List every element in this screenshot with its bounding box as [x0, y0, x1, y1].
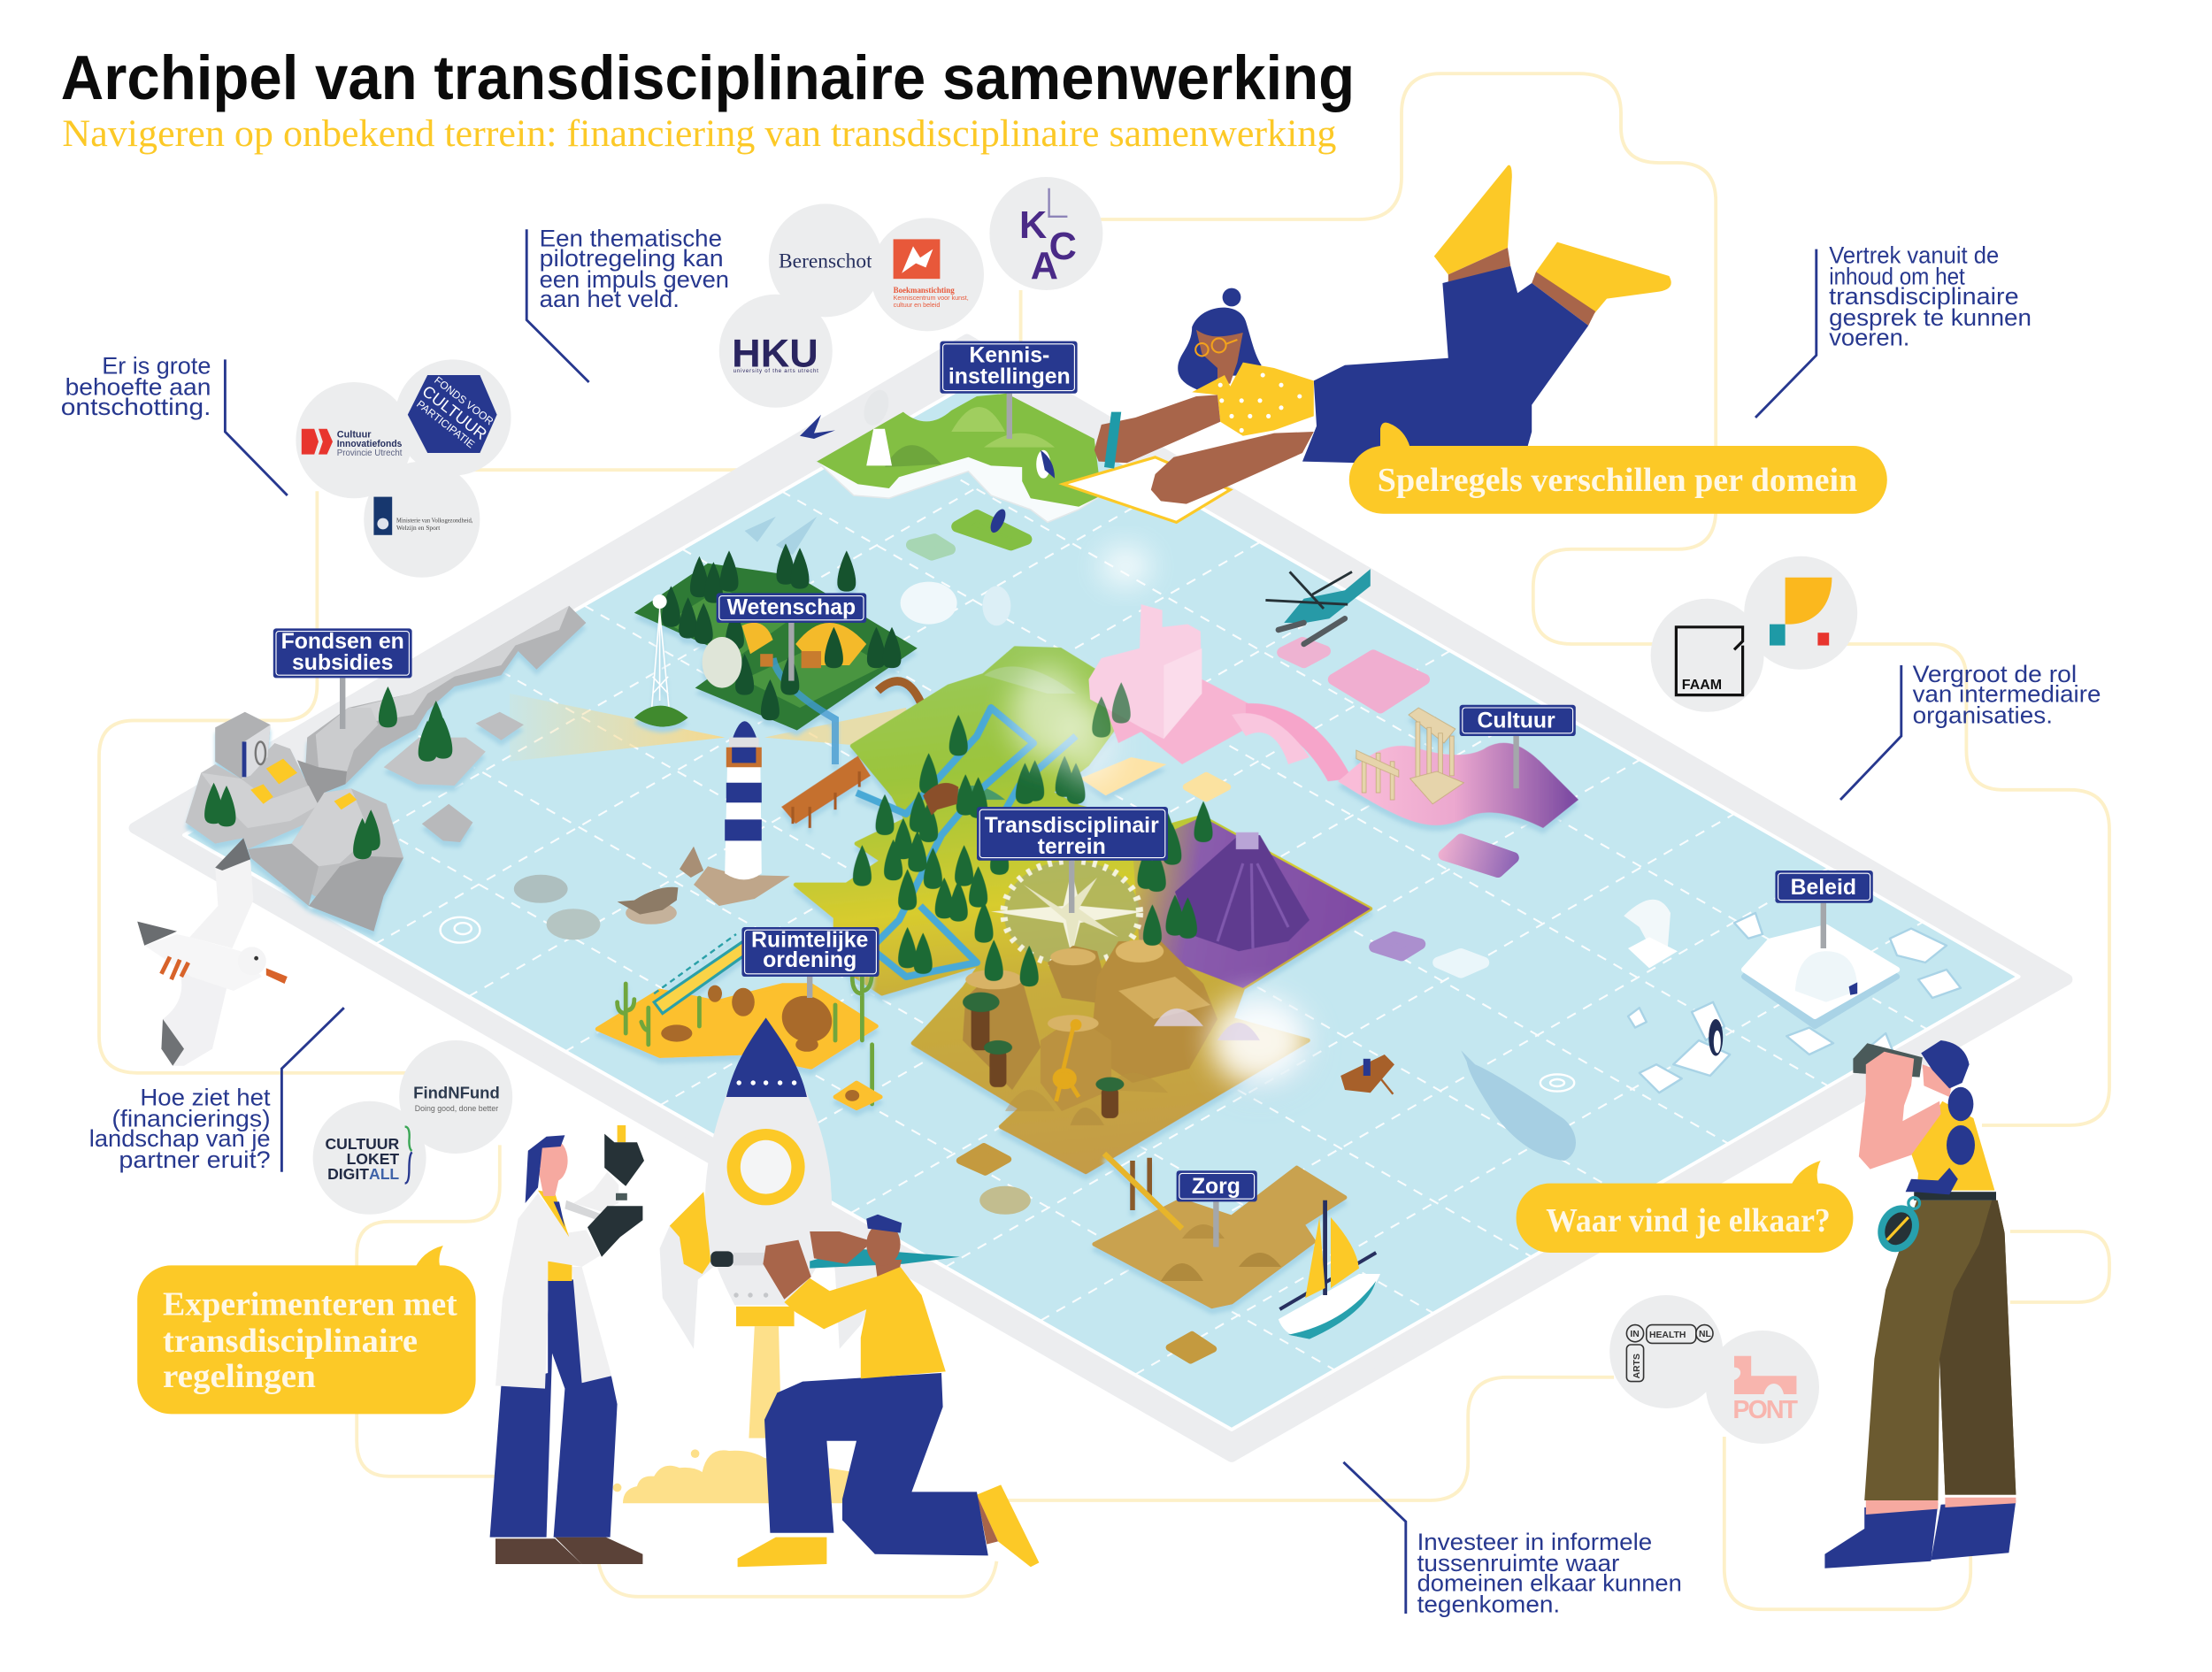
compass	[1870, 1198, 1926, 1259]
note: Vergroot de rol: van intermediaire	[1913, 680, 2101, 708]
pink arch bridge	[1246, 703, 1352, 781]
logo: Cultuur Loket DigitALL	[313, 1101, 426, 1215]
cliffs	[817, 446, 1102, 522]
sign: Transdisciplinair terrein: Transdisciplinair	[985, 814, 1159, 838]
sign: Wetenschap: Wetenschap	[727, 595, 856, 619]
note: Investeer in informele tussenruimte	[1343, 1462, 1682, 1617]
seagull	[137, 838, 288, 1066]
giraffe	[1055, 1021, 1079, 1101]
boulders	[661, 986, 840, 1052]
trees	[662, 543, 901, 720]
bubble: Experimenteren met transdisciplinaire regelingen: regelingen	[163, 1358, 316, 1395]
sign: Cultuur	[1460, 705, 1576, 788]
head	[875, 1260, 902, 1281]
sign: Kennisinstellingen	[940, 341, 1078, 439]
note: Hoe ziet het landschap: (financierings)	[111, 1105, 271, 1132]
ankles	[1448, 248, 1510, 283]
nose	[726, 1017, 807, 1097]
arch bridge	[878, 681, 923, 708]
rowing boat	[1340, 1055, 1394, 1094]
logo: Arts in Health NL	[1609, 1295, 1723, 1408]
note: Vertrek vanuit de inhoud	[1755, 242, 2032, 418]
board water	[184, 380, 2019, 1430]
pencil	[1104, 412, 1121, 469]
note: Hoe ziet het landschap: landschap van je	[89, 1124, 271, 1152]
note: Vertrek vanuit de inhoud: voeren.	[1829, 323, 1909, 350]
river	[773, 658, 835, 764]
note: thematische pilotregeling: een impuls geven	[540, 265, 729, 293]
island: Wetenschap	[634, 543, 923, 764]
hands	[763, 1240, 811, 1300]
logo: KLCA	[989, 177, 1102, 290]
swirl	[441, 917, 1574, 1092]
logo: Cultuur Loket DigitALL: DIGITALL	[327, 1165, 399, 1183]
note: Investeer in informele tussenruimte: Investeer in informele	[1417, 1528, 1652, 1555]
shoes	[495, 1538, 642, 1564]
sign: Beleid	[1775, 871, 1873, 948]
baobabs	[972, 1005, 1118, 1118]
temple ruins	[1356, 708, 1463, 804]
logo group: kennis	[719, 177, 1102, 408]
sign: Beleid: Beleid	[1791, 876, 1856, 900]
head	[538, 1168, 559, 1196]
radio mast	[651, 595, 670, 715]
forest	[853, 715, 1212, 986]
tents	[741, 623, 773, 654]
character: scientist	[490, 1125, 644, 1564]
character: kneeling man with brush	[710, 1215, 1039, 1567]
brush	[710, 1251, 733, 1267]
sign: Wetenschap	[717, 593, 866, 681]
ankles	[1866, 1498, 2016, 1515]
logo: KLCA: K	[1019, 204, 1047, 247]
board	[134, 340, 2067, 1456]
logo: Ministerie VWS: Welzijn en Sport	[396, 524, 440, 532]
whale	[1461, 1050, 1576, 1161]
fish shadows	[745, 517, 817, 555]
logo: HKU: university of the arts utrecht	[733, 368, 818, 374]
logo: Fonds voor Cultuurparticipatie: FONDS VOOR	[432, 374, 496, 428]
logo: Boekmanstichting: Boekmanstichting	[894, 286, 955, 295]
glasses	[1195, 338, 1237, 356]
sign: Ruimtelijke ordening	[741, 927, 879, 998]
logo: Fonds voor Cultuurparticipatie	[395, 359, 511, 476]
lighthouse beams	[510, 694, 913, 762]
rocks in water	[384, 712, 524, 842]
boots	[1824, 1503, 1938, 1568]
right arm	[1151, 432, 1314, 504]
bubble: Waar vind je elkaar?	[1517, 1161, 1853, 1253]
trousers	[1864, 1200, 2016, 1500]
trousers	[764, 1373, 988, 1555]
porthole	[727, 1129, 805, 1205]
logo: Boekmanstichting: cultuur en beleid	[894, 301, 940, 309]
note: Vertrek vanuit de inhoud: transdisciplinaire	[1829, 282, 2019, 310]
logo group: ontmoeting	[1609, 1295, 1819, 1444]
note: Er is grote behoefte: Er is grote	[102, 351, 211, 379]
polar bear	[1624, 900, 1678, 968]
bubble: Waar vind je elkaar?: Waar vind je elkaar?	[1546, 1202, 1831, 1239]
note: thematische pilotregeling: aan het veld.	[540, 285, 680, 312]
teal pencil	[810, 1248, 960, 1269]
sign: Zorg	[1177, 1170, 1257, 1247]
face	[1923, 1064, 1954, 1097]
logo: Cultuur Innovatiefonds	[296, 382, 412, 498]
note: Er is grote behoefte: behoefte aan	[65, 372, 211, 400]
binoculars	[1853, 1043, 1923, 1078]
cacti	[618, 948, 872, 1104]
suspension bridge	[1133, 1158, 1149, 1210]
logo: Berenschot: Berenschot	[779, 249, 872, 272]
hair and braid	[1921, 1040, 1970, 1088]
beach	[1080, 757, 1166, 795]
note: Vergroot de rol: organisaties.	[1913, 702, 2053, 729]
shirt	[1192, 363, 1314, 436]
logo: FindNFund: FindNFund	[413, 1084, 500, 1102]
mist and crates	[703, 637, 741, 688]
fog	[1010, 667, 1310, 1085]
bubble: Experimenteren met transdisciplinaire regelingen: transdisciplinaire	[163, 1323, 418, 1360]
character: woman lying with notebook	[1064, 165, 1671, 522]
island: Ruimtelijke ordening	[597, 934, 880, 1108]
small hills	[1005, 1073, 1168, 1125]
logo: Cultuur Innovatiefonds: Provincie Utrecht	[337, 449, 402, 458]
logo: Boekmanstichting: Kenniscentrum voor kunst,	[894, 294, 969, 302]
logo group: financiers	[313, 1040, 512, 1215]
sign: Transdisciplinair terrein: terrein	[1038, 835, 1106, 859]
boulder facets	[316, 708, 378, 771]
left fin	[660, 1192, 722, 1349]
arm	[565, 1200, 602, 1220]
logo: FindNFund: Doing good, done better	[415, 1104, 498, 1113]
note: Hoe ziet het landschap: Hoe ziet het	[140, 1084, 271, 1111]
belt	[1914, 1192, 1996, 1200]
logo: HKU: HKU	[732, 331, 818, 375]
lower boulder	[250, 788, 403, 932]
note: Vergroot de rol	[1840, 660, 2101, 800]
shirt	[784, 1267, 946, 1378]
board rim	[134, 340, 2067, 1456]
note: thematische pilotregeling: Een thematische	[540, 224, 722, 251]
vial	[616, 1125, 627, 1200]
lighthouse	[680, 721, 790, 906]
sign: Fondsen en subsidies: Fondsen en	[281, 630, 404, 654]
body	[705, 1017, 832, 1305]
logo: Berenschot	[769, 203, 882, 317]
sailboat	[1279, 1200, 1380, 1339]
logo: kwink mark	[1744, 556, 1857, 670]
shirt	[548, 1262, 572, 1281]
mesa rocks	[963, 940, 1217, 1111]
trousers	[490, 1279, 618, 1538]
logo: Ministerie VWS: Ministerie van Volksgezondheid,	[396, 516, 473, 524]
island: Transdisciplinair terrein	[781, 648, 1371, 1172]
hair	[1178, 308, 1262, 390]
compass rose	[991, 861, 1144, 965]
logo: KLCA: C	[1049, 226, 1077, 268]
head and beak	[238, 947, 266, 975]
logo: Cultuur Innovatiefonds: Innovatiefonds	[337, 439, 402, 449]
bear	[923, 783, 958, 816]
water details	[441, 515, 1576, 1361]
logo: Boekmanstichting	[871, 218, 984, 331]
rocket	[613, 1017, 880, 1503]
seal	[618, 887, 678, 924]
note: thematische pilotregeling: pilotregeling kan	[540, 244, 724, 272]
sign: Zorg: Zorg	[1192, 1175, 1240, 1199]
logo: Arts in Health NL: HEALTH	[1649, 1331, 1686, 1340]
logo: Arts in Health NL: IN	[1630, 1330, 1640, 1339]
note: Investeer in informele tussenruimte: tegenkomen.	[1417, 1590, 1560, 1617]
rivets	[733, 1292, 768, 1298]
sign: Fondsen en subsidies	[273, 628, 412, 729]
satellite dish	[859, 387, 894, 465]
note: Er is grote behoefte	[61, 351, 288, 495]
note: Hoe ziet het landschap	[89, 1008, 344, 1173]
note: Investeer in informele tussenruimte: domeinen elkaar kunnen	[1417, 1568, 1682, 1596]
pink and purple pads	[911, 515, 1513, 972]
sign: Ruimtelijke ordening: Ruimtelijke	[751, 928, 868, 952]
bubble: Spelregels verschillen per domein: Spelregels verschillen per domein	[1378, 462, 1857, 499]
logo group: intermediairs	[1651, 556, 1857, 712]
note: Hoe ziet het landschap: partner eruit?	[119, 1146, 271, 1173]
note: Vertrek vanuit de inhoud: Vertrek vanuit de	[1829, 242, 1999, 269]
face and neck	[1196, 330, 1243, 385]
right fin	[828, 1203, 880, 1349]
logo: Arts in Health NL: ARTS	[1632, 1354, 1642, 1378]
upper wing	[189, 838, 253, 948]
helicopter	[1265, 569, 1371, 644]
left boulder	[186, 743, 319, 849]
pink city	[1088, 604, 1352, 781]
logo: Fonds voor Cultuurparticipatie: CULTUUR	[419, 381, 491, 443]
note: Investeer in informele tussenruimte: tussenruimte waar	[1417, 1549, 1619, 1576]
exhaust and smoke	[613, 1326, 854, 1503]
floes	[1628, 913, 1961, 1093]
body	[144, 934, 262, 991]
bubble: Experimenteren met transdisciplinaire regelingen	[137, 1246, 476, 1414]
mist cloud above board	[1100, 547, 1151, 586]
igloo	[1795, 951, 1857, 1002]
puffins	[800, 415, 1055, 535]
sign: Kennisinstellingen: Kennis-	[969, 344, 1049, 368]
logo: KLCA: A	[1031, 245, 1058, 288]
truss bridge	[654, 941, 750, 1014]
logo: Cultuur Innovatiefonds: Cultuur	[337, 429, 372, 440]
jetty	[781, 755, 871, 828]
character: woman with binoculars	[1824, 1040, 2016, 1568]
safe	[215, 712, 271, 778]
gloves	[604, 1134, 644, 1186]
purple volcano area	[1133, 817, 1371, 988]
logo: PONT	[1706, 1331, 1819, 1444]
logo: Arts in Health NL: NL	[1699, 1330, 1712, 1339]
arm and hand	[1859, 1052, 1941, 1170]
title: Archipel van transdisciplinaire samenwerking	[61, 42, 1355, 112]
collar and tie	[538, 1191, 569, 1237]
logo: Cultuur Loket DigitALL: CULTUUR	[325, 1135, 399, 1153]
signs	[273, 341, 1873, 1247]
sign: Cultuur: Cultuur	[1478, 709, 1555, 732]
island: Cultuur	[1338, 708, 1578, 828]
ridge	[304, 606, 586, 787]
island: Fondsen en subsidies rocks	[186, 606, 586, 932]
base	[736, 1307, 795, 1326]
note: Vertrek vanuit de inhoud: inhoud om het	[1829, 263, 1965, 290]
trousers	[1302, 266, 1588, 467]
gold bars	[250, 759, 357, 809]
lab coat	[495, 1193, 600, 1389]
penguins	[1709, 1019, 1723, 1056]
island: Beleid	[1628, 913, 1961, 1093]
note: Vertrek vanuit de inhoud: gesprek te kunnen	[1829, 303, 2032, 331]
note: Vergroot de rol: Vergroot de rol	[1913, 660, 2077, 687]
logo: Ministerie VWS	[364, 462, 480, 578]
hills and rivers	[984, 666, 1076, 694]
logo: PONT: PONT	[1732, 1396, 1798, 1424]
notebook	[1064, 457, 1230, 522]
logo: FindNFund	[399, 1040, 512, 1154]
logo: HKU	[719, 295, 833, 408]
hills	[951, 407, 1005, 432]
island: Kennisinstellingen	[800, 387, 1102, 535]
bubble: Spelregels verschillen per domein	[1349, 423, 1887, 514]
sign: Transdisciplinair terrein	[977, 807, 1168, 913]
rock trees	[204, 686, 452, 859]
bubble: Experimenteren met transdisciplinaire regelingen: Experimenteren met	[163, 1285, 457, 1323]
stepping stones	[514, 582, 1227, 1361]
island: Zorg	[1094, 1154, 1345, 1307]
logo: Cultuur Loket DigitALL: LOKET	[347, 1150, 399, 1168]
logo: FAAM: FAAM	[1682, 678, 1722, 693]
feet	[1434, 165, 1512, 274]
sign: Kennisinstellingen: instellingen	[949, 365, 1071, 389]
subtitle: Navigeren op onbekend terrein: financiering van transdisciplinaire samenwerking	[62, 113, 1336, 155]
logo: FAAM	[1651, 599, 1764, 712]
note: Er is grote behoefte: ontschotting.	[61, 393, 211, 420]
shirt	[1911, 1101, 1994, 1191]
logo group: fondsen	[296, 359, 511, 578]
shoes	[738, 1538, 826, 1567]
lower wing	[163, 963, 234, 1066]
sign: Fondsen en subsidies: subsidies	[292, 651, 393, 675]
green top	[817, 394, 1102, 507]
sign: Ruimtelijke ordening: ordening	[763, 948, 856, 972]
logo: Fonds voor Cultuurparticipatie: PARTICIPATIE	[414, 398, 477, 450]
note: thematische pilotregeling	[526, 224, 729, 382]
left arm	[1094, 395, 1220, 463]
